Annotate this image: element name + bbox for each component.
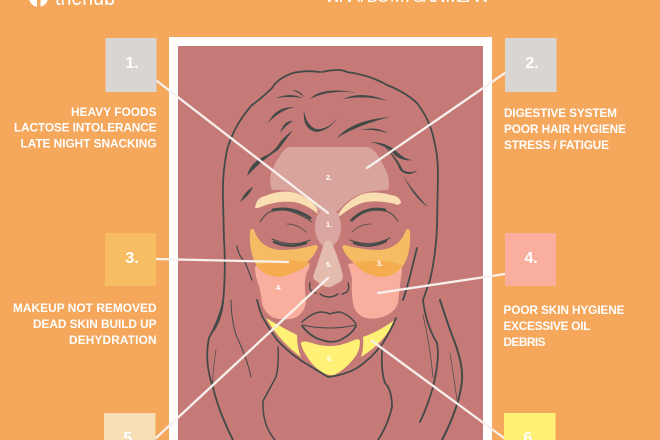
zone 5: nose: 5.	[326, 260, 332, 269]
callout 6	[504, 413, 556, 440]
callout 1: HEAVY FOODS	[71, 105, 157, 119]
zone labels 3 4 6: 3.	[377, 259, 383, 268]
callout 4	[504, 233, 625, 349]
zone labels 3 4 6: 4.	[276, 283, 282, 292]
callout 2: DIGESTIVE SYSTEM	[504, 106, 617, 120]
callout 3	[13, 233, 157, 347]
callout 3: 3.	[125, 250, 139, 267]
zone 1: T-zone: 1.	[326, 220, 332, 229]
callout 4: 4.	[524, 250, 538, 267]
callout 4: POOR SKIN HYGIENE	[504, 303, 625, 317]
callout 2: STRESS / FATIGUE	[504, 138, 609, 152]
connector lines	[156, 73, 505, 438]
callout 3: DEHYDRATION	[69, 333, 156, 347]
nose and lips	[302, 283, 356, 342]
zone labels 3 4 6	[276, 259, 383, 363]
callout 3: DEAD SKIN BUILD UP	[33, 317, 157, 331]
hair and head outline	[207, 70, 462, 440]
callout 2	[504, 38, 626, 152]
callout 4: DEBRIS	[504, 335, 546, 349]
callout 4: EXCESSIVE OIL	[504, 319, 590, 333]
zone labels 3 4 6: 6.	[327, 354, 333, 363]
zone 2: forehead: 2.	[326, 173, 332, 182]
callout 1: LACTOSE INTOLERANCE	[14, 120, 157, 134]
callout 3: MAKEUP NOT REMOVED	[13, 301, 157, 315]
callout 2: POOR HAIR HYGIENE	[504, 122, 626, 136]
zone 2: forehead	[270, 147, 389, 211]
callout 1: 1.	[125, 55, 139, 72]
logo	[29, 0, 115, 11]
hair strands on forehead	[240, 90, 428, 207]
zone 5: nose	[313, 240, 343, 287]
zone 4: cheeks	[255, 263, 402, 319]
zone 3: under eyes	[250, 229, 410, 277]
callout 5	[104, 413, 156, 440]
panel: face illustration frame	[169, 37, 492, 440]
zone 1: T-zone	[315, 207, 341, 247]
callout 2: 2.	[525, 55, 539, 72]
eyebrows and closed eyes	[260, 209, 398, 246]
callout 1	[14, 38, 157, 150]
zone 6: chin and jaw	[266, 318, 396, 375]
zone 2 brow highlight	[255, 192, 401, 216]
callout 1: LATE NIGHT SNACKING	[20, 136, 156, 150]
